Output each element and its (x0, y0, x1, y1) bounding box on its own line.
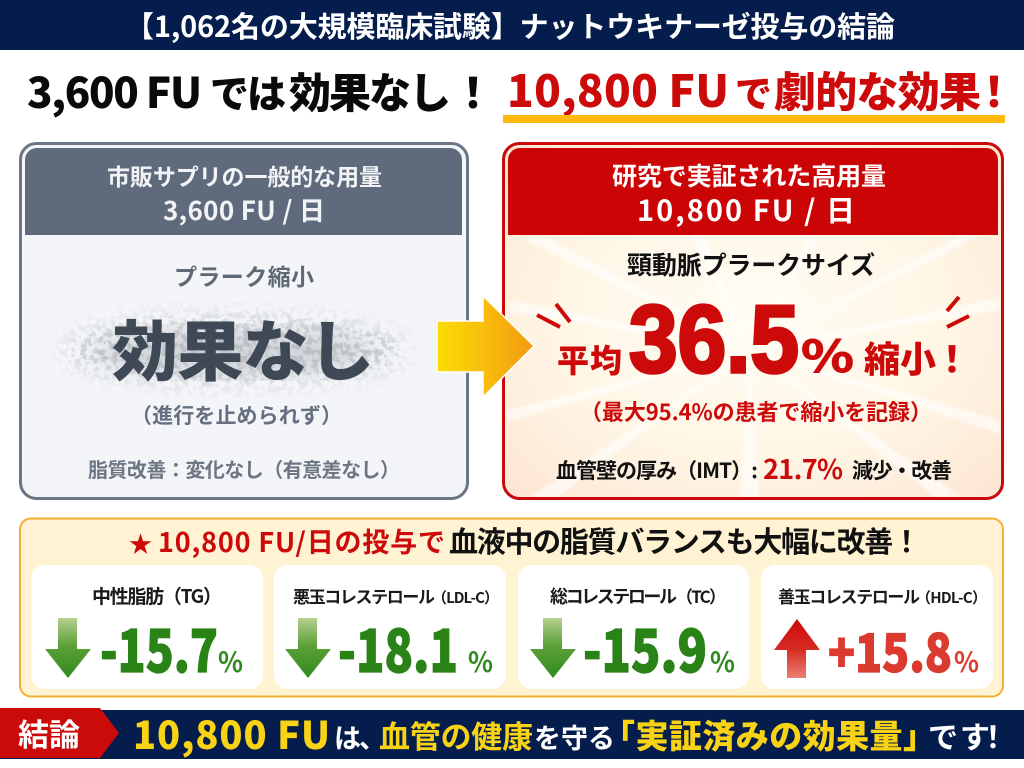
card: triglycerides: 中性脂肪（TG） (92, 582, 222, 609)
card: HDL cholesterol: （HDL-C） (916, 587, 987, 608)
arrow: from low dose to high dose (437, 296, 534, 397)
headline: 10,800 FU has dramatic effect: ！ (973, 59, 1015, 120)
headline: 3,600 FU has no effect: 効果なし (289, 60, 451, 121)
label: plaque reduction: プラーク縮小 (174, 258, 314, 292)
card: total cholesterol: % (710, 641, 735, 681)
stat: IMT (556, 448, 952, 487)
headline: 3,600 FU has no effect: 3,600 FU (27, 60, 202, 121)
top title bar (0, 0, 1024, 50)
card: LDL cholesterol (274, 565, 506, 689)
panel heading: ★ (129, 525, 152, 559)
headline: 3,600 FU has no effect (27, 60, 494, 121)
card: total cholesterol: -15.9 (583, 605, 707, 689)
headline: 10,800 FU has dramatic effect (503, 56, 1015, 123)
card: LDL cholesterol: % (468, 641, 493, 681)
card: triglycerides: % (218, 641, 243, 681)
emphasis ticks (537, 297, 969, 327)
card: LDL cholesterol: （LDL-C） (432, 587, 499, 608)
card: HDL cholesterol: 善玉コレステロール (778, 583, 920, 608)
smudge behind no-effect text (65, 320, 405, 380)
panel header: proven dose: 研究で実証された高用量 (612, 157, 886, 193)
panel header: proven dose: 10,800 FU / 日 (637, 188, 855, 230)
headline: 3,600 FU has no effect: ！ (452, 60, 494, 121)
stat: IMT: 減少・改善 (852, 455, 952, 485)
note: lipids unchanged: 脂質改善：変化なし（有意差なし） (88, 454, 400, 483)
conclusion text: ！ (978, 713, 1008, 757)
conclusion tag (0, 708, 119, 758)
conclusion text: 10,800 FU (133, 705, 330, 760)
big stat: average 36.5% reduction (557, 286, 970, 393)
conclusion text: を守る (534, 717, 615, 756)
icon: down arrow (45, 618, 91, 678)
headline: 10,800 FU has dramatic effect: 劇的な効果 (774, 59, 981, 120)
card: triglycerides: -15.7 (100, 605, 218, 689)
conclusion text (133, 705, 1008, 760)
conclusion tag: 結論 (18, 710, 80, 755)
big stat: average 36.5% reduction: % (801, 321, 854, 385)
conclusion text: 「実証済みの効果量」 (602, 710, 936, 758)
no-effect text: 効果なし (112, 299, 374, 395)
headline: 3,600 FU has no effect: では (210, 64, 286, 120)
panel header: common dose: 市販サプリの一般的な用量 (107, 158, 382, 192)
note: up to 95.4%: （最大95.4%の患者で縮小を記録） (580, 395, 932, 427)
card: triglycerides (31, 565, 263, 689)
big stat: average 36.5% reduction: 縮小 (864, 331, 936, 383)
stat: IMT: 21.7% (763, 448, 843, 487)
icon: up arrow (774, 619, 820, 678)
panel: 3,600 FU market supplement dose (20, 144, 468, 498)
card: total cholesterol (518, 565, 749, 689)
conclusion bar (0, 705, 1024, 760)
conclusion text: は、 (334, 717, 386, 756)
headline: 10,800 FU has dramatic effect: 10,800 FU (507, 56, 729, 120)
card: HDL cholesterol (761, 565, 993, 689)
card: HDL cholesterol: +15.8 (828, 612, 952, 687)
panel heading: 10,800 FU/日の投与で (158, 521, 445, 560)
card: LDL cholesterol: -18.1 (338, 605, 458, 689)
panel heading (129, 519, 921, 561)
top title bar: 【1,062名の大規模臨床試験】ナットウキナーゼ投与の結論 (125, 4, 895, 46)
card: HDL cholesterol: % (954, 641, 979, 681)
panel heading: 血液中の脂質バランスも大幅に改善！ (449, 519, 921, 561)
big stat: average 36.5% reduction: 平均 (557, 336, 622, 382)
panel header: common dose: 3,600 FU / 日 (163, 191, 325, 228)
label: carotid plaque size: 頸動脈プラークサイズ (627, 246, 875, 282)
card: total cholesterol: （TC） (676, 583, 726, 608)
sunburst rays (508, 235, 1000, 497)
big stat: average 36.5% reduction: 36.5 (629, 286, 799, 393)
big stat: average 36.5% reduction: ！ (934, 331, 970, 383)
card: LDL cholesterol: 悪玉コレステロール (293, 583, 435, 608)
note: progression not stopped: （進行を止められず） (131, 400, 342, 430)
panel: blood lipid improvements (20, 518, 1003, 696)
icon: down arrow (285, 618, 331, 678)
panel: 10,800 FU researched high dose (504, 144, 1002, 498)
panel header: proven dose (508, 148, 998, 235)
stat: IMT: 血管壁の厚み（IMT）: (556, 455, 758, 485)
card: total cholesterol: 総コレステロール (550, 583, 677, 609)
icon: down arrow (530, 618, 576, 678)
conclusion text: です (928, 713, 990, 757)
panel header: common dose (25, 148, 462, 235)
headline: 10,800 FU has dramatic effect: で (735, 64, 772, 118)
conclusion text: 血管の健康 (379, 712, 533, 757)
